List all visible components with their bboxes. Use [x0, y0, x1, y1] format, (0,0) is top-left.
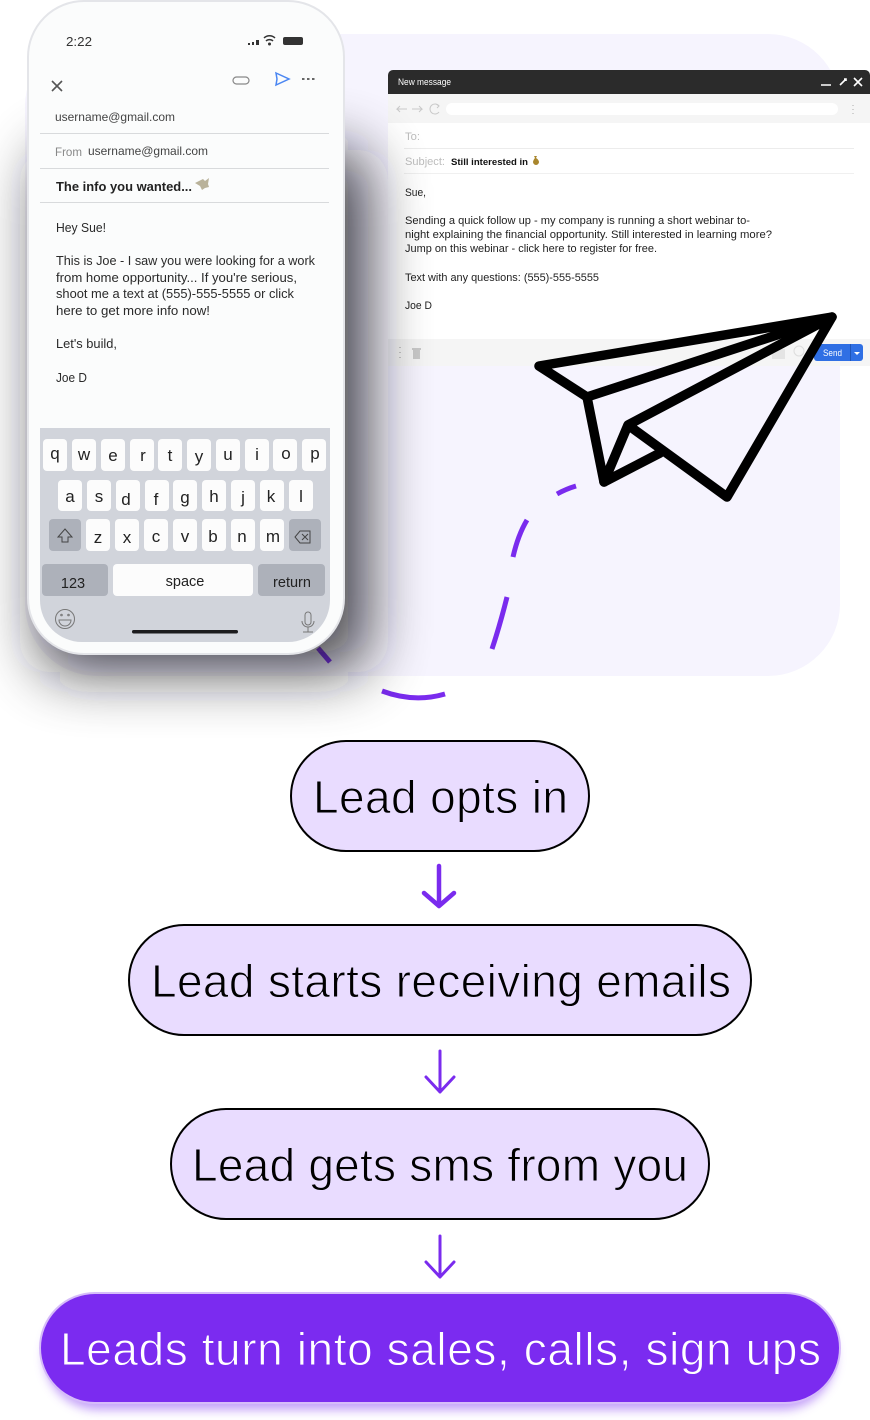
recipient address: username@gmail.com — [55, 110, 175, 124]
subject field — [404, 156, 854, 174]
email body: Joe D — [405, 300, 432, 312]
panel: desktop email compose window — [388, 70, 870, 366]
arrow: step 3 to 4 — [426, 1236, 454, 1277]
icon: paper plane — [539, 317, 832, 497]
key labels — [50, 444, 320, 547]
keyboard: space — [166, 574, 204, 590]
key labels: i — [255, 445, 259, 464]
phone drop shadow — [40, 150, 368, 672]
key labels: g — [180, 488, 190, 507]
subject field: Subject: — [405, 156, 445, 168]
message body: Hey Sue! — [56, 221, 106, 235]
letter keys — [43, 439, 326, 596]
message body: Let's build, — [56, 337, 117, 351]
emoji icon — [56, 610, 74, 628]
key labels: d — [121, 490, 131, 509]
key labels: l — [299, 487, 303, 506]
email body: Sending a quick follow up - my company is running a short webinar to- — [405, 215, 750, 227]
message body: This is Joe - I saw you were looking for a work — [56, 254, 316, 268]
compose action icons — [52, 73, 314, 91]
key labels: v — [181, 527, 190, 546]
window title bar: New message — [398, 77, 451, 87]
step: lead gets sms from you — [171, 1109, 709, 1219]
key labels: x — [123, 528, 132, 547]
keyboard: 123 — [61, 576, 85, 592]
key labels: o — [281, 444, 291, 463]
key labels: n — [237, 527, 247, 546]
key labels: b — [208, 527, 218, 546]
key labels: j — [240, 488, 245, 507]
browser toolbar — [388, 94, 870, 123]
email body — [405, 187, 772, 312]
panel: lavender background — [25, 34, 840, 676]
shift icon — [58, 529, 72, 542]
message body: from home opportunity... If you're serious, — [56, 271, 297, 285]
subject line — [40, 178, 329, 203]
recipient field: To: — [405, 131, 420, 143]
key labels: m — [266, 527, 280, 546]
key labels: z — [94, 528, 102, 547]
microphone icon — [302, 612, 314, 632]
keyboard: return — [273, 575, 311, 591]
key labels: y — [195, 447, 204, 466]
status bar — [66, 34, 303, 49]
key labels: w — [77, 445, 91, 464]
key labels: k — [267, 487, 276, 506]
key labels: c — [152, 527, 161, 546]
message body — [56, 221, 316, 385]
function keys — [42, 519, 325, 596]
key labels: p — [310, 444, 320, 463]
step: lead starts receiving emails — [129, 925, 751, 1035]
arrow: step 1 to 2 — [424, 866, 454, 906]
dashed flight path — [318, 486, 576, 698]
step: lead opts in: Lead opts in — [313, 771, 568, 823]
key labels: t — [168, 446, 173, 465]
subject field: Still interested in — [451, 157, 528, 168]
step: leads turn into sales, calls, sign ups: Leads turn into sales, calls, sign ups — [60, 1323, 821, 1375]
keyboard — [40, 428, 330, 642]
compose footer with send button: Send — [823, 348, 842, 358]
key labels: s — [95, 487, 103, 506]
home indicator — [132, 630, 238, 634]
subject line: The info you wanted... — [56, 179, 192, 194]
key labels: h — [209, 487, 219, 506]
message body: shoot me a text at (555)-555-5555 or click — [56, 287, 295, 301]
key labels: a — [65, 487, 75, 506]
step: lead gets sms from you: Lead gets sms from you — [192, 1139, 688, 1191]
key labels: u — [223, 445, 233, 464]
key labels: f — [154, 490, 159, 509]
key labels: e — [108, 446, 118, 465]
email body: night explaining the financial opportunity. Still interested in learning more? — [405, 229, 772, 241]
email body: Text with any questions: (555)-555-5555 — [405, 272, 599, 284]
phone mockup — [28, 1, 344, 654]
key labels: q — [50, 444, 60, 463]
step: lead opts in — [291, 741, 589, 851]
from address: username@gmail.com — [88, 144, 208, 158]
from address: From — [55, 145, 82, 159]
arrow: step 2 to 3 — [426, 1051, 454, 1092]
step: leads turn into sales, calls, sign ups — [40, 1293, 840, 1410]
from address — [40, 144, 329, 169]
status bar: 2:22 — [66, 34, 92, 49]
window title bar — [388, 70, 870, 94]
step: lead starts receiving emails: Lead starts receiving emails — [151, 955, 731, 1007]
phone body — [28, 1, 344, 654]
compose footer with send button — [388, 339, 870, 366]
email body: Jump on this webinar - click here to register for free. — [405, 243, 657, 255]
delete icon — [295, 531, 310, 543]
message body: here to get more info now! — [56, 304, 210, 318]
key labels: r — [140, 446, 146, 465]
message body: Joe D — [56, 371, 87, 385]
email body: Sue, — [405, 187, 426, 199]
